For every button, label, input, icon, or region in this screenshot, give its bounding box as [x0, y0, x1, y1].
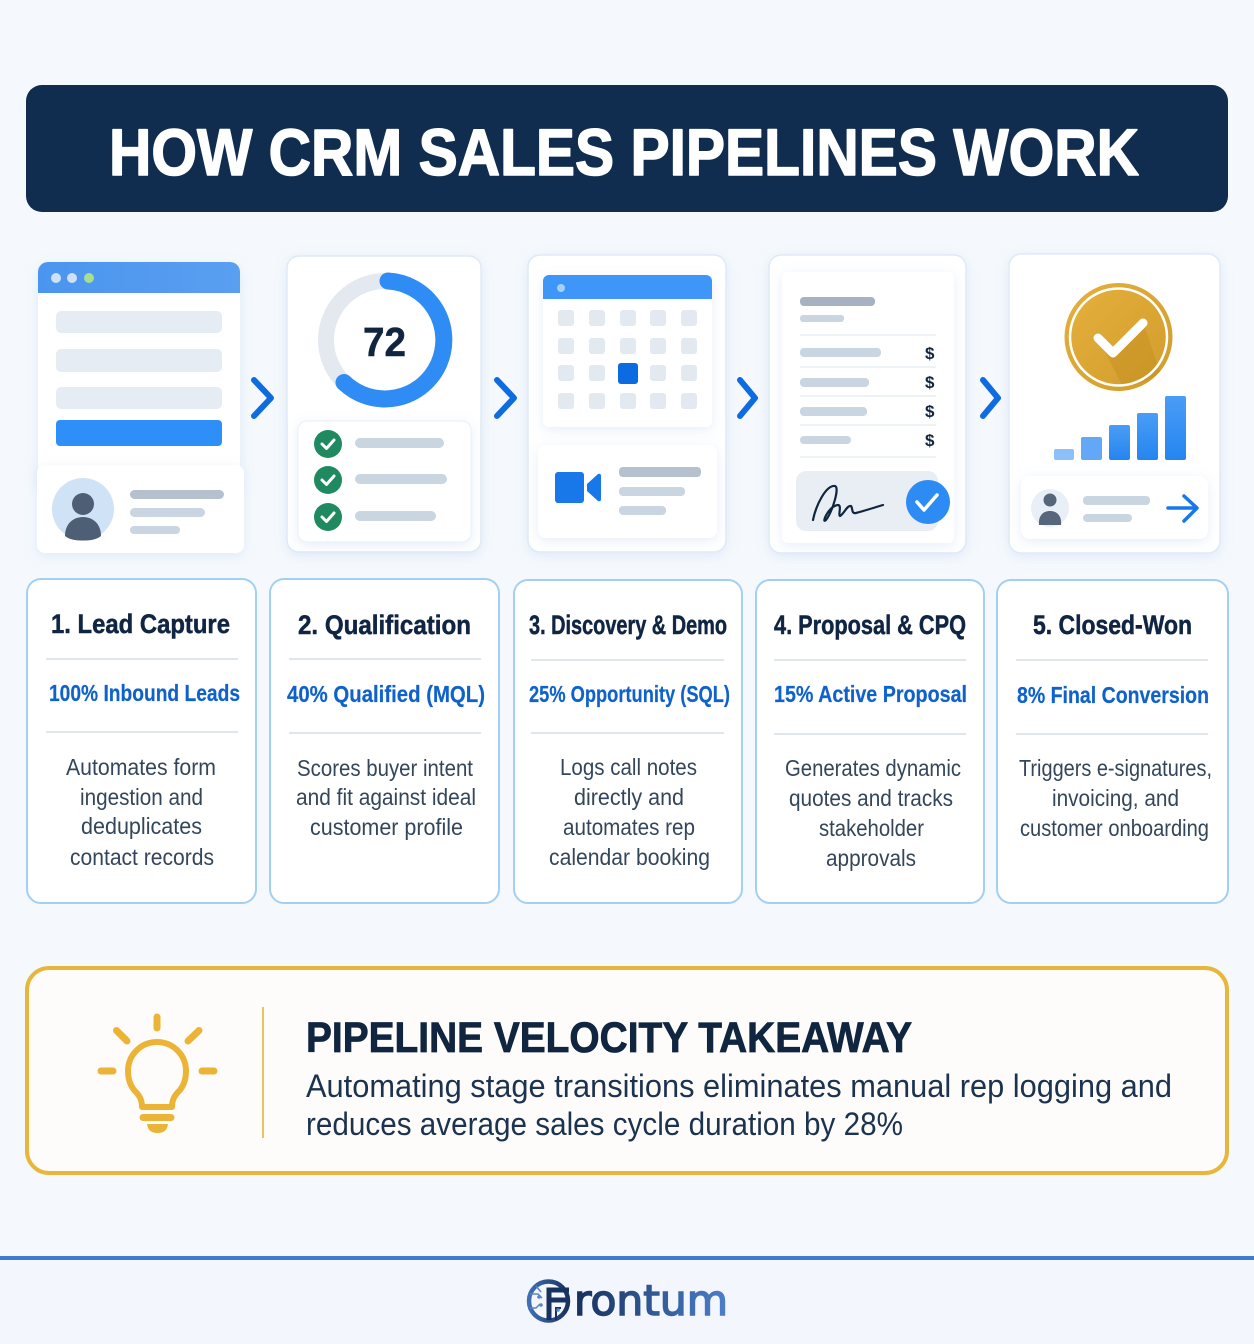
description: [785, 755, 961, 871]
illustration: proposal document: [769, 255, 966, 553]
description: Logs call notes: [560, 754, 697, 780]
panel: qualification: 2. Qualification: [298, 610, 471, 640]
contact card: [37, 465, 244, 553]
callout: pipeline velocity takeaway: [27, 968, 1227, 1173]
panel: discovery and demo: [514, 580, 742, 903]
description: [66, 754, 216, 870]
logo mark: [529, 1282, 569, 1320]
description: Automates form: [66, 754, 216, 780]
description: [1019, 755, 1212, 841]
footer: [0, 1256, 1254, 1344]
description: Scores buyer intent: [297, 755, 473, 781]
gold badge: [1064, 283, 1172, 391]
panel: lead capture: [27, 579, 256, 903]
arrow 3: [740, 380, 755, 416]
illustration: proposal document: $: [925, 402, 935, 421]
description: ingestion and: [80, 784, 203, 810]
illustration: proposal document: $: [925, 373, 935, 392]
description: customer profile: [310, 814, 463, 840]
video call card: [538, 445, 717, 538]
panel: closed-won: [997, 580, 1228, 903]
icon: light bulb: [101, 1017, 214, 1133]
panel: discovery and demo: 3. Discovery & Demo: [529, 610, 727, 640]
panel: lead capture: 100% Inbound Leads: [49, 680, 240, 706]
panel: proposal and cpq: 4. Proposal & CPQ: [774, 610, 966, 640]
signature box: [796, 471, 950, 531]
description: deduplicates: [81, 813, 202, 839]
description: Triggers e-signatures,: [1019, 755, 1212, 781]
arrow 1: [254, 380, 271, 416]
illustration: proposal document: $: [925, 344, 935, 363]
description: approvals: [826, 845, 916, 871]
illustration: lead capture form: [37, 262, 244, 553]
illustration: closed-won badge and growth: [1009, 254, 1220, 553]
description: invoicing, and: [1052, 785, 1179, 811]
panel: proposal and cpq: [756, 580, 984, 903]
description: directly and: [574, 784, 684, 810]
panel: lead capture: 1. Lead Capture: [51, 609, 230, 639]
description: and fit against ideal: [296, 784, 476, 810]
title: HOW CRM SALES PIPELINES WORK: [109, 115, 1139, 189]
description: stakeholder: [819, 815, 924, 841]
illustration: proposal document: $: [925, 431, 935, 450]
description: quotes and tracks: [789, 785, 953, 811]
arrow 2: [497, 380, 514, 416]
calendar: [543, 275, 712, 427]
takeaway text: [306, 1068, 1172, 1142]
panel: discovery and demo: 25% Opportunity (SQL): [529, 681, 730, 707]
arrow 4: [983, 380, 998, 416]
description: Generates dynamic: [785, 755, 961, 781]
customer card: [1021, 476, 1208, 539]
panel: qualification: 40% Qualified (MQL): [287, 681, 485, 707]
title banner: [26, 85, 1228, 212]
growth bars: [1054, 396, 1186, 460]
panel: qualification: [270, 579, 499, 903]
logo: rontum: [574, 1276, 728, 1325]
takeaway text: reduces average sales cycle duration by 28%: [306, 1106, 903, 1142]
description: [549, 754, 710, 870]
description: [296, 755, 476, 840]
score ring: 72: [363, 319, 406, 365]
takeaway text: Automating stage transitions eliminates manual rep logging and: [306, 1068, 1172, 1104]
takeaway heading: PIPELINE VELOCITY TAKEAWAY: [306, 1015, 912, 1062]
illustration: lead score and checklist: [287, 256, 481, 552]
description: calendar booking: [549, 844, 710, 870]
panel: proposal and cpq: 15% Active Proposal: [774, 681, 967, 707]
description: automates rep: [563, 814, 695, 840]
checklist: [298, 421, 471, 542]
description: contact records: [70, 844, 214, 870]
description: customer onboarding: [1020, 815, 1209, 841]
illustration: calendar and video call: [528, 255, 726, 552]
panel: closed-won: 5. Closed-Won: [1033, 610, 1192, 640]
panel: closed-won: 8% Final Conversion: [1017, 682, 1209, 708]
score ring: [326, 281, 444, 399]
